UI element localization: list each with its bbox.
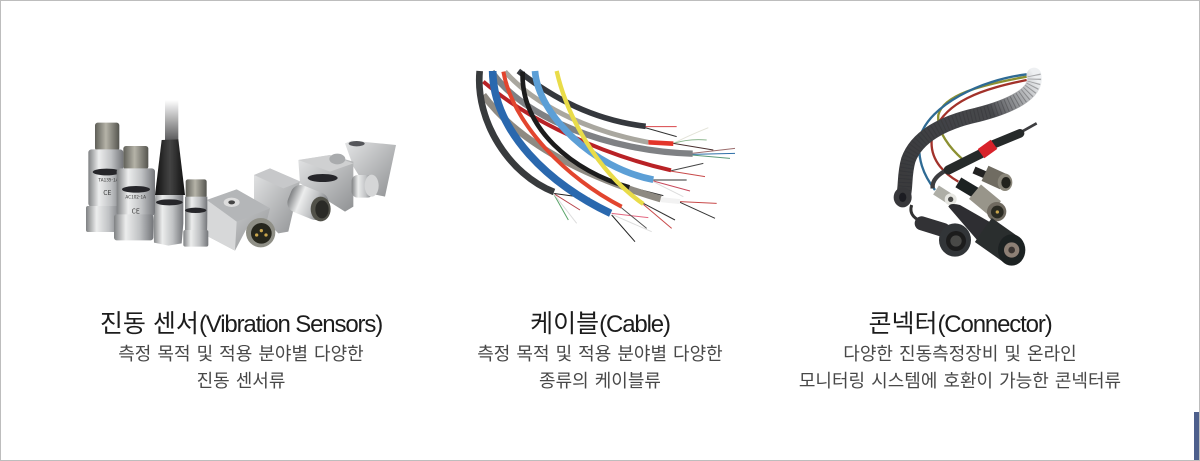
grey cable <box>492 72 693 154</box>
description: 진동 센서류 <box>197 367 285 393</box>
image: cables <box>479 71 735 242</box>
orange red cable <box>503 72 622 207</box>
sensor 2 <box>114 146 155 240</box>
column: vibration sensors <box>100 304 382 393</box>
description: 측정 목적 및 적용 분야별 다양한 <box>118 340 364 366</box>
heading: 콘넥터(Connector) <box>868 304 1052 340</box>
thin conductor wires <box>553 127 735 242</box>
sensor 7 <box>298 154 379 212</box>
image: connectors <box>894 74 1037 266</box>
sensor 6 <box>254 168 331 233</box>
sensor 1: TA135-1A <box>98 177 119 183</box>
sensor 2: AC102-1A <box>125 194 146 200</box>
description: 모니터링 시스템에 호환이 가능한 콘넥터류 <box>799 367 1121 393</box>
sensor 3 <box>153 100 185 246</box>
silver connector <box>958 182 1006 221</box>
sensor 1 <box>86 123 123 232</box>
yellow cable <box>557 71 643 204</box>
description: 종류의 케이블류 <box>539 367 661 393</box>
tan braided cable <box>483 95 661 199</box>
black thin cable <box>523 72 629 187</box>
braided cable <box>505 72 648 142</box>
BNC connector <box>936 190 957 205</box>
coiled cable <box>903 75 1034 197</box>
blue cable <box>493 71 611 213</box>
description <box>799 340 1121 393</box>
sensor 2: CE <box>132 205 140 215</box>
description <box>477 340 723 393</box>
sensor 8 <box>345 141 396 197</box>
dark red cable <box>483 82 671 170</box>
sensor 5 <box>207 189 275 251</box>
red end sleeve <box>648 142 673 144</box>
image: vibration sensors <box>86 100 396 251</box>
heading: 케이블(Cable) <box>530 304 670 340</box>
column: connector <box>799 304 1121 393</box>
column: cable <box>477 304 723 393</box>
description: 다양한 진동측정장비 및 온라인 <box>843 340 1077 366</box>
red band <box>981 144 994 154</box>
description: 측정 목적 및 적용 분야별 다양한 <box>477 340 723 366</box>
dark cable left <box>479 71 554 192</box>
black cable top <box>518 71 646 126</box>
small round connector <box>974 170 1012 191</box>
light blue cable <box>535 71 653 180</box>
description <box>118 340 364 393</box>
sensor 4 <box>183 179 208 247</box>
large black connector <box>948 204 1025 266</box>
coloured wires <box>919 74 1027 190</box>
scroll tab <box>1194 412 1199 460</box>
panel-mount connector <box>922 223 971 257</box>
thin dark cable with red band <box>1020 123 1037 133</box>
sensor 1: CE <box>103 187 111 197</box>
heading: 진동 센서(Vibration Sensors) <box>100 304 382 340</box>
